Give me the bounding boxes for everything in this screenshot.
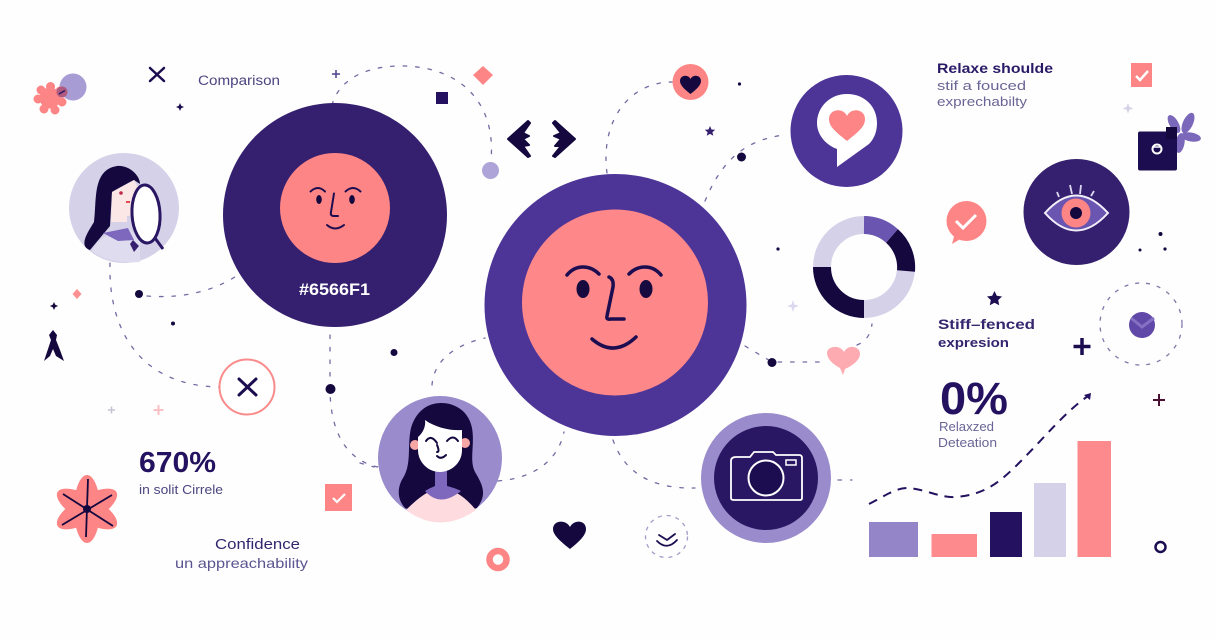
text: confidence: Confidence bbox=[215, 536, 300, 553]
icon: navy figure bbox=[44, 330, 64, 361]
stat: 0 percent: Deteation bbox=[938, 436, 997, 450]
icon: check square bbox=[325, 484, 352, 511]
chart: donut bbox=[822, 225, 906, 309]
main face bbox=[567, 267, 661, 348]
text: relax block bbox=[937, 60, 1053, 109]
icon: smiling avatar bbox=[378, 396, 502, 522]
icon: plus bbox=[332, 70, 340, 78]
icon: faint sparkles bbox=[108, 405, 164, 415]
stat: 670 percent: in solit Cirrele bbox=[139, 483, 223, 497]
icon: pink heart bbox=[827, 347, 860, 375]
text: stiff fenced bbox=[938, 316, 1035, 350]
text: relax block: stif a fouced bbox=[937, 79, 1026, 93]
icon: coral diamond small bbox=[72, 289, 82, 299]
icon: top cross bbox=[150, 68, 164, 81]
text: comparison: Comparison bbox=[198, 73, 280, 88]
text: stiff fenced: expresion bbox=[938, 335, 1009, 350]
icon: check bubble bbox=[946, 201, 986, 244]
icon: plus bbox=[1074, 338, 1090, 355]
panel: large dark circle with face bbox=[223, 103, 447, 327]
dots bbox=[135, 82, 1167, 394]
text: stiff fenced: Stiff–fenced bbox=[938, 316, 1035, 332]
icon: camera badge bbox=[701, 413, 831, 543]
icon: navy sparkle bbox=[50, 302, 58, 310]
icon: coral ring bbox=[490, 551, 506, 568]
stat: 0 percent: 0% bbox=[940, 373, 1008, 424]
stat: 670 percent bbox=[139, 447, 223, 497]
icon: navy star bbox=[987, 291, 1002, 305]
icon: small star bbox=[705, 126, 715, 136]
text: confidence: un appreachability bbox=[175, 555, 308, 571]
stat: 0 percent bbox=[938, 373, 1008, 450]
text: confidence bbox=[175, 536, 308, 571]
icon: double arrows bbox=[508, 121, 575, 157]
chart: bar chart bbox=[869, 441, 1111, 557]
panel: main circle with face bbox=[484, 174, 746, 436]
icon: sparkle bbox=[787, 300, 799, 312]
icon: avatar with mirror bbox=[69, 153, 179, 263]
icon: navy heart bbox=[553, 522, 586, 549]
icon: sparkle bbox=[1123, 103, 1133, 114]
icon: lilac dot bbox=[482, 162, 499, 179]
icon: dark red plus bbox=[1153, 394, 1165, 406]
small face bbox=[310, 188, 360, 228]
icon: sparkle bbox=[176, 103, 184, 111]
icon: cross ring bbox=[220, 360, 274, 414]
text: relax block: exprechabilty bbox=[937, 95, 1028, 109]
icon: coral flower with purple dot bbox=[34, 74, 86, 114]
icon: coral asterisk flower bbox=[51, 475, 123, 543]
icon: camera square with purple petals bbox=[1138, 111, 1202, 170]
icon: dashed orbit bbox=[1100, 283, 1182, 365]
stat: 0 percent: Relaxzed bbox=[939, 420, 994, 434]
chart: dashed trend arrow bbox=[869, 393, 1091, 504]
icon: dashed chevron badge bbox=[646, 516, 688, 558]
hex label: #6566F1 bbox=[299, 280, 370, 299]
icon: navy square bbox=[436, 92, 448, 104]
icon: eye badge bbox=[1024, 159, 1130, 265]
icon: check square bbox=[1131, 63, 1152, 87]
icon: speech bubble badge bbox=[790, 75, 902, 187]
icon: heart badge bbox=[672, 64, 708, 100]
mirror bbox=[155, 238, 163, 249]
text: relax block: Relaxe shoulde bbox=[937, 60, 1053, 76]
stat: 670 percent: 670% bbox=[139, 447, 216, 479]
icon: coral diamond bbox=[473, 66, 493, 85]
icon: small ring bbox=[1156, 542, 1166, 552]
